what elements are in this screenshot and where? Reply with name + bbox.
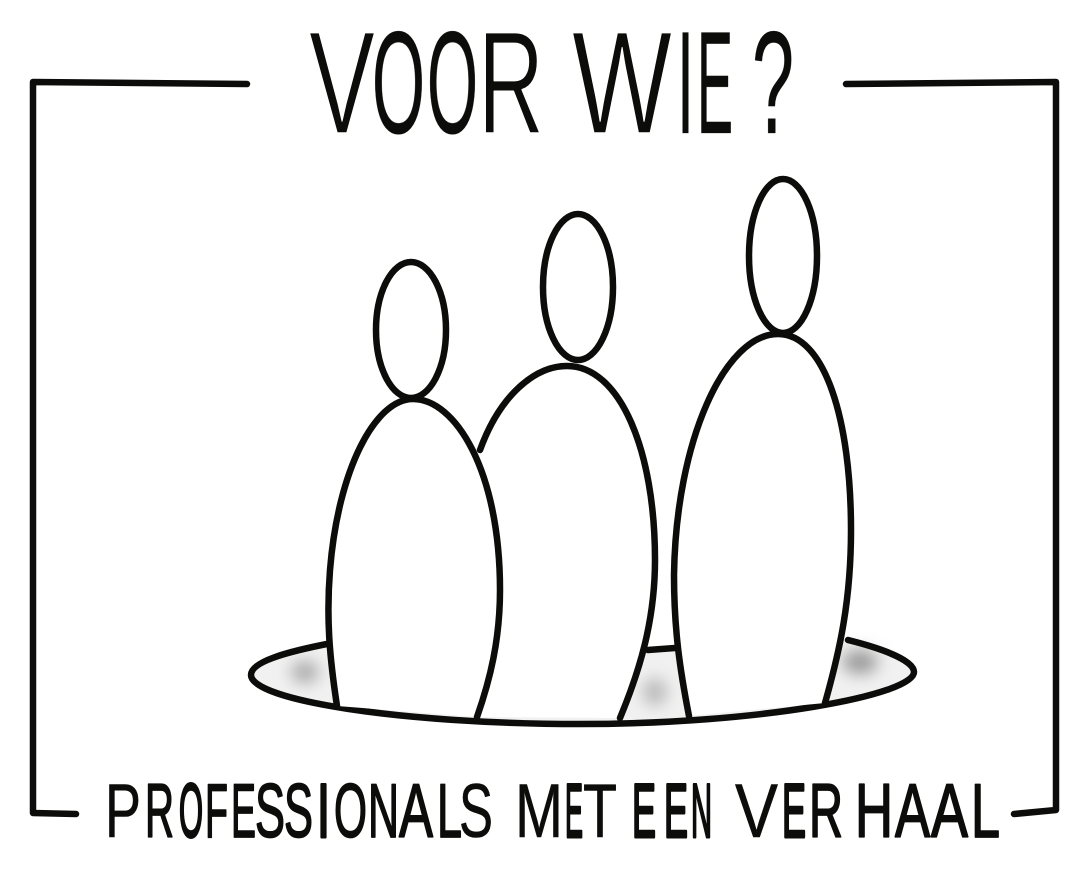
caption: E — [664, 769, 688, 854]
caption: P — [105, 769, 141, 854]
caption: H — [855, 769, 893, 854]
caption: T — [583, 769, 616, 854]
caption: L — [437, 769, 462, 854]
figure: left — [328, 262, 500, 717]
caption: I — [317, 769, 330, 854]
figure: right — [674, 179, 851, 716]
caption: A — [895, 769, 930, 854]
caption: F — [205, 769, 228, 854]
caption: M — [515, 769, 563, 854]
caption: S — [459, 769, 493, 854]
caption: E — [231, 769, 256, 854]
caption: N — [691, 769, 712, 854]
caption: S — [255, 769, 285, 854]
caption: V — [735, 769, 778, 854]
caption: E — [565, 769, 583, 854]
caption: E — [632, 769, 656, 854]
caption: O — [334, 769, 367, 854]
title: E — [697, 1, 733, 164]
title: I — [677, 1, 694, 164]
caption: S — [284, 769, 313, 854]
caption: E — [782, 769, 806, 854]
caption: O — [179, 769, 203, 854]
figure: middle — [477, 214, 655, 718]
caption: R — [145, 769, 174, 854]
title: O — [427, 1, 478, 164]
title: W — [572, 1, 672, 164]
caption: L — [971, 769, 1000, 854]
title: R — [478, 1, 544, 164]
caption: A — [931, 769, 968, 854]
caption: N — [368, 769, 399, 854]
hole — [251, 640, 914, 724]
caption: R — [809, 769, 843, 854]
title: V — [309, 1, 375, 164]
frame: left bracket — [33, 82, 247, 814]
title: ? — [752, 1, 794, 164]
caption: A — [399, 769, 433, 854]
title: O — [372, 1, 425, 164]
illustration: three figures standing in a hole — [251, 179, 914, 724]
frame: right bracket — [846, 82, 1056, 814]
